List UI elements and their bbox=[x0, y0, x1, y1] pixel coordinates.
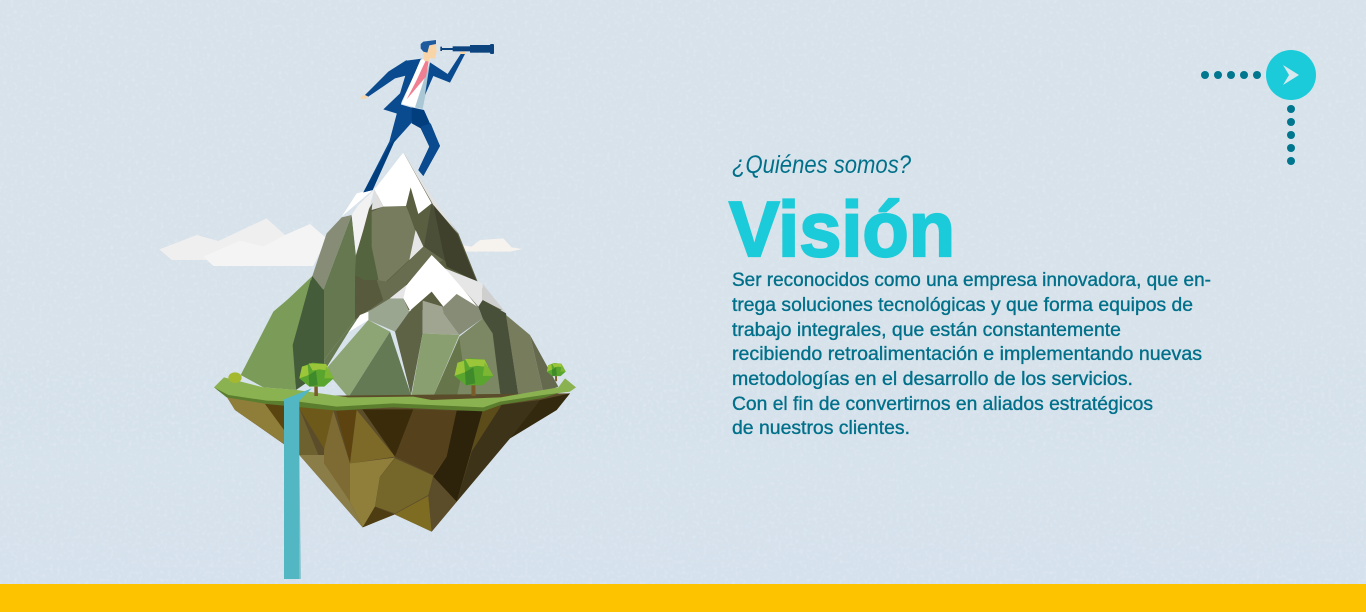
body paragraph: de nuestros clientes. bbox=[732, 417, 910, 439]
right cloud bbox=[443, 238, 523, 252]
lower mountain bbox=[241, 255, 558, 400]
island ground bbox=[227, 393, 570, 532]
body paragraph: recibiendo retroalimentación e implementando nuevas bbox=[732, 343, 1202, 365]
body paragraph: Ser reconocidos como una empresa innovadora, que en- bbox=[732, 269, 1211, 291]
upper mountain bbox=[277, 152, 503, 310]
title: Visión bbox=[729, 185, 955, 273]
waterfall bbox=[284, 388, 312, 579]
bottom yellow bar bbox=[0, 584, 1366, 612]
body paragraph: trega soluciones tecnológicas y que forma equipos de bbox=[732, 294, 1193, 316]
navigation dots vertical bbox=[1287, 105, 1295, 165]
island grass bbox=[214, 377, 576, 411]
illustration: businessman on floating island bbox=[159, 40, 576, 579]
businessman with telescope bbox=[360, 40, 494, 192]
arrow button bbox=[1266, 50, 1316, 100]
left clouds bbox=[159, 218, 327, 266]
body paragraph: metodologías en el desarrollo de los servicios. bbox=[732, 368, 1133, 390]
bush and trees bbox=[228, 358, 566, 396]
body paragraph: Con el fin de convertirnos en aliados estratégicos bbox=[732, 393, 1153, 415]
eyebrow text: ¿Quiénes somos? bbox=[732, 151, 911, 179]
body paragraph: trabajo integrales, que están constantemente bbox=[732, 319, 1121, 341]
body paragraph bbox=[732, 269, 1211, 439]
navigation dots horizontal bbox=[1201, 71, 1261, 79]
